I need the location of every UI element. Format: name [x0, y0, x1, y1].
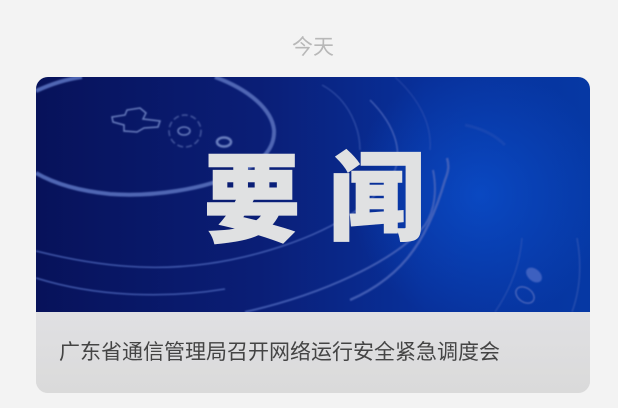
icon: small marks — [513, 265, 545, 306]
panel: news card — [36, 77, 590, 393]
large ring — [36, 77, 274, 195]
icon: gears — [112, 108, 231, 147]
caption panel — [36, 312, 590, 393]
caption text: 广东省通信管理局召开网络运行安全紧急调度会 — [59, 341, 500, 364]
banner image — [36, 77, 590, 312]
headline 要闻: 闻 — [329, 121, 425, 260]
headline 要闻: 要 — [204, 123, 300, 262]
date heading: 今天 — [292, 36, 334, 59]
headline 要闻 — [204, 121, 425, 262]
orbit lines — [36, 77, 580, 312]
